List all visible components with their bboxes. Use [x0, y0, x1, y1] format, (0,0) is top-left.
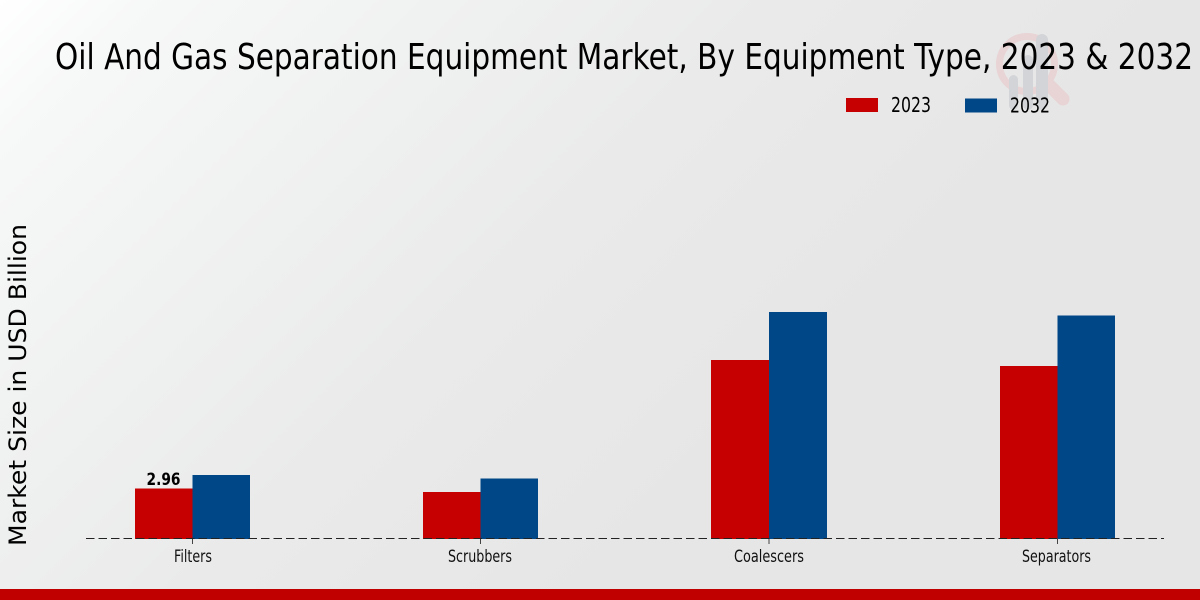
bars: Coalescers	[711, 312, 827, 539]
bars: Separators	[1000, 316, 1115, 539]
legend	[846, 93, 1050, 118]
category label: Scrubbers: Scrubbers	[448, 547, 512, 567]
footer band	[0, 589, 1200, 600]
icon: watermark logo	[1000, 34, 1063, 110]
bars: Filters	[135, 475, 250, 539]
legend item: 2023: 2023	[891, 93, 931, 117]
bar chart	[86, 312, 1164, 567]
category label: Separators: Separators	[1022, 547, 1091, 567]
x axis	[86, 538, 1164, 544]
category label: Coalescers: Coalescers	[734, 547, 804, 567]
legend item: 2023	[846, 93, 931, 117]
category label: Filters: Filters	[174, 547, 212, 567]
data label: 2.96: 2.96	[146, 470, 180, 490]
bars: Scrubbers	[423, 478, 538, 539]
legend item: 2032: 2032	[1010, 94, 1050, 118]
legend item: 2032	[965, 94, 1050, 118]
y-axis title: Market Size in USD Billion	[4, 224, 32, 546]
